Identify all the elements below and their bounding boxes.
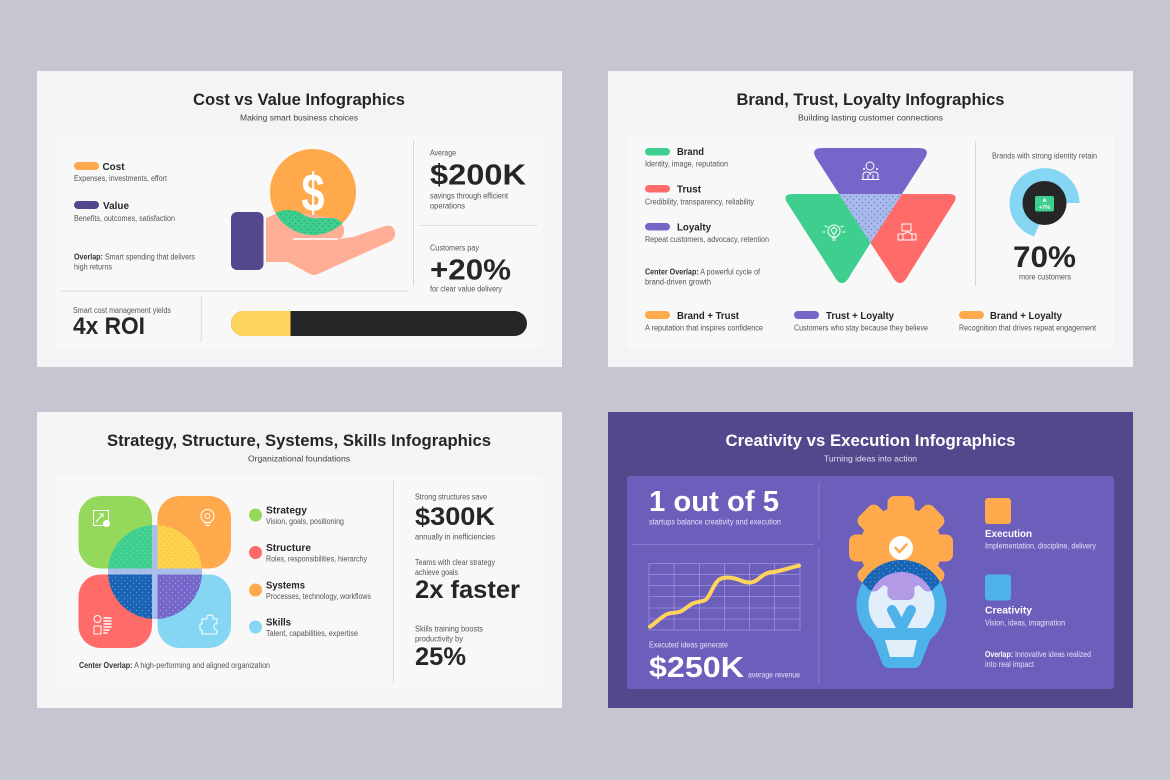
stat: average savings: savings through efficient (430, 192, 509, 200)
legend: systems (249, 580, 371, 601)
stat: average savings: operations (430, 202, 465, 210)
stat: structures save: Strong structures save (415, 492, 487, 502)
stat: customers pay: Customers pay (430, 244, 479, 252)
legend: creativity: Creativity (985, 604, 1032, 616)
divider line (392, 481, 395, 683)
overlap note (74, 252, 195, 272)
legend: brand: Identity, image, reputation (645, 160, 728, 168)
divider line (974, 141, 977, 286)
stat: ROI: Smart cost management yields (73, 306, 171, 315)
legend: execution: Execution (985, 528, 1032, 540)
stat: faster: Teams with clear strategy (415, 558, 495, 567)
panel: cost vs value (37, 71, 562, 367)
legend: trust + loyalty: Customers who stay because they believe (794, 324, 928, 332)
legend: cost: Cost (102, 161, 125, 173)
stat: executed ideas: average revenue (748, 670, 800, 680)
legend: brand + loyalty: Recognition that drives repeat engagement (959, 324, 1097, 332)
center overlap note: Center Overlap: A powerful cycle of (645, 268, 761, 276)
legend: brand + trust (645, 310, 763, 332)
legend: trust + loyalty (794, 310, 928, 332)
stat: retention donut: Brands with strong identity retain (992, 152, 1097, 160)
stat: ROI (73, 306, 171, 340)
subtitle: Making smart business choices (240, 112, 358, 122)
legend: execution: Implementation, discipline, delivery (985, 542, 1096, 550)
legend: cost (74, 161, 168, 183)
stat: retention donut (992, 152, 1097, 282)
stat: customers pay: for clear value delivery (430, 284, 502, 294)
legend: skills: Talent, capabilities, expertise (266, 629, 358, 638)
illustration: hand holding coin: $ (302, 163, 324, 223)
stat: average savings: Average (430, 148, 456, 158)
legend: cost: Expenses, investments, effort (74, 174, 168, 183)
center overlap note: Center Overlap: A high-performing and aligned organization (79, 661, 270, 670)
center overlap note: brand-driven growth (645, 278, 711, 286)
legend: strategy (249, 504, 344, 526)
subtitle: Turning ideas into action (824, 454, 917, 464)
stat: faster (415, 558, 520, 604)
stat: one out of five: startups balance creativity and execution (649, 518, 781, 526)
four-quadrant venn diagram (78, 496, 231, 648)
legend: strategy: Strategy (266, 504, 307, 516)
stat: customers pay: +20% (430, 254, 511, 286)
legend: loyalty (645, 222, 769, 244)
legend: structure: Roles, responsibilities, hierarchy (266, 554, 367, 564)
legend: systems: Systems (266, 580, 305, 592)
panel: creativity vs execution (608, 412, 1133, 708)
legend: systems: Processes, technology, workflows (266, 592, 371, 601)
overlap note: into real impact (985, 660, 1035, 669)
title: Cost vs Value Infographics (193, 90, 405, 109)
icon: person (862, 162, 879, 180)
title: Creativity vs Execution Infographics (726, 431, 1016, 450)
subtitle: Building lasting customer connections (798, 112, 943, 122)
overlap note: high returns (74, 262, 112, 272)
legend: loyalty: Repeat customers, advocacy, retention (645, 235, 769, 244)
legend: execution (985, 498, 1096, 550)
legend: strategy: Vision, goals, positioning (266, 517, 344, 526)
legend: trust (645, 184, 754, 206)
illustration: gear and light bulb (849, 496, 953, 668)
stat: ROI: 4x ROI (73, 313, 145, 340)
legend: skills: Skills (266, 616, 291, 628)
legend: brand + trust: A reputation that inspires confidence (645, 324, 763, 332)
stat: customers pay (430, 244, 511, 294)
stat: productivity: 25% (415, 643, 466, 671)
stat: productivity (415, 624, 483, 671)
icon: strategy board (94, 510, 110, 527)
stat: average savings: $200K (430, 160, 526, 192)
legend: brand + loyalty (959, 310, 1097, 332)
illustration: hand holding coin (231, 149, 395, 275)
icon: light bulb (823, 225, 845, 240)
icon: handshake (898, 224, 916, 240)
legend: brand (645, 146, 728, 168)
stat: one out of five: 1 out of 5 (649, 486, 779, 518)
stat: structures save (415, 492, 495, 542)
legend: value: Benefits, outcomes, satisfaction (74, 214, 175, 223)
legend: trust: Credibility, transparency, reliability (645, 198, 754, 206)
legend: brand: Brand (677, 146, 704, 158)
legend: value: Value (103, 200, 129, 212)
progress bar (231, 311, 527, 336)
stat: faster: achieve goals (415, 568, 458, 577)
title: Strategy, Structure, Systems, Skills Infographics (107, 431, 491, 450)
triangle venn diagram (785, 148, 956, 283)
panel: brand trust loyalty (608, 71, 1133, 367)
stat: retention donut: +7% (1039, 205, 1050, 211)
stat: faster: 2x faster (415, 576, 520, 604)
legend: skills (249, 616, 358, 638)
overlap note: Overlap: Innovative ideas realized (985, 650, 1091, 659)
subtitle: Organizational foundations (248, 454, 350, 464)
legend: structure: Structure (266, 542, 311, 554)
icon: roles (94, 616, 111, 634)
stat: structures save: $300K (415, 503, 495, 531)
panel: strategy structure systems skills (37, 412, 562, 708)
stat: executed ideas: Executed ideas generate (649, 640, 728, 650)
divider lines (60, 140, 538, 342)
line chart (649, 564, 800, 630)
overlap note (985, 650, 1091, 669)
icon: gear bulb (201, 510, 214, 526)
legend: creativity (985, 574, 1065, 628)
legend: trust: Trust (677, 184, 701, 196)
legend: loyalty: Loyalty (677, 222, 711, 234)
stat: productivity: Skills training boosts (415, 624, 483, 634)
center overlap note (645, 268, 761, 286)
legend: creativity: Vision, ideas, imagination (985, 618, 1065, 628)
legend: trust + loyalty: Trust + Loyalty (826, 310, 894, 322)
stat: retention donut: more customers (1019, 272, 1071, 282)
icon: puzzle (200, 615, 217, 634)
legend: brand + trust: Brand + Trust (677, 310, 739, 322)
stat: productivity: productivity by (415, 634, 463, 644)
stat: structures save: annually in inefficiencies (415, 532, 495, 542)
stat: retention donut: 70% (1013, 241, 1076, 274)
stat: executed ideas (649, 640, 800, 684)
stat: average savings (430, 148, 526, 210)
title: Brand, Trust, Loyalty Infographics (736, 90, 1004, 109)
legend: structure (249, 542, 367, 564)
divider lines (632, 482, 819, 683)
legend: value (74, 200, 175, 223)
overlap note: Overlap: Smart spending that delivers (74, 252, 195, 262)
legend: brand + loyalty: Brand + Loyalty (990, 310, 1062, 322)
stat: executed ideas: $250K (649, 652, 744, 684)
